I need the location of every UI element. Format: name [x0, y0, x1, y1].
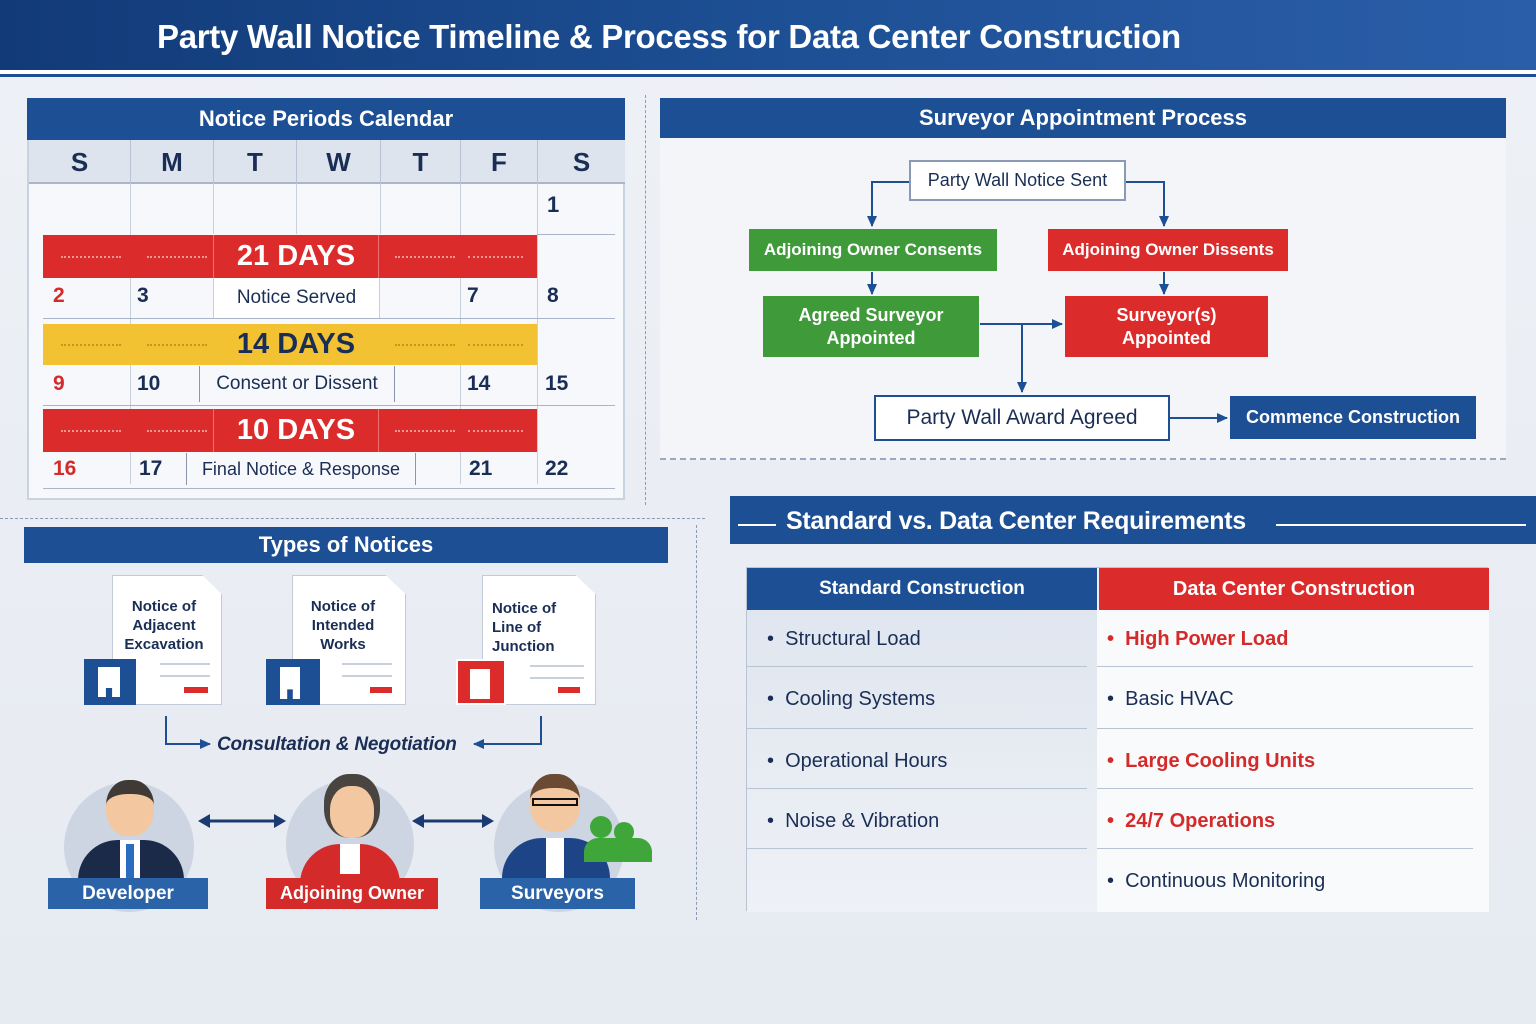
heading: surveyor: Surveyor Appointment Process [919, 105, 1247, 130]
column header: standard [747, 568, 1097, 610]
arrows: consultation [165, 716, 542, 749]
panel: calendar: Notice Served [237, 287, 356, 308]
icon: building [84, 659, 136, 705]
label: surveyors: Surveyors [511, 882, 604, 904]
band: 14 days: 14 DAYS [237, 328, 355, 360]
panel: calendar: 14 [467, 372, 490, 395]
box: dissents [1048, 229, 1288, 271]
column header: data center [1099, 568, 1489, 610]
flowchart arrows [867, 181, 1228, 423]
box: notice sent: Party Wall Notice Sent [928, 170, 1107, 190]
band: 10 days [43, 409, 537, 452]
data center items [1097, 628, 1473, 892]
box: consents: Adjoining Owner Consents [764, 240, 982, 259]
band: 21 days: 21 DAYS [237, 240, 355, 272]
standard items: • Structural Load [767, 628, 921, 650]
panel: calendar: 8 [547, 284, 559, 307]
person: adjoining owner [286, 774, 414, 878]
band: 10 days: 10 DAYS [237, 414, 355, 446]
label: adjoining owner [266, 878, 438, 909]
box: award agreed: Party Wall Award Agreed [906, 406, 1138, 429]
column header: data center: Data Center Construction [1173, 578, 1415, 600]
day headers: M [161, 146, 183, 176]
box: surveyors appointed: Surveyor(s) [1116, 304, 1217, 324]
panel: calendar: 17 [139, 457, 162, 480]
panel: calendar: 22 [545, 457, 568, 480]
label: adjoining owner: Adjoining Owner [280, 883, 424, 903]
panel: calendar: 7 [467, 284, 479, 307]
data center items: • Continuous Monitoring [1107, 870, 1325, 892]
band: 21 days [43, 235, 537, 278]
panel: calendar: Consent or Dissent [216, 373, 378, 394]
notice: line of junction [456, 575, 596, 705]
panel: calendar: 1 [547, 192, 559, 217]
panel: calendar [27, 98, 625, 500]
day headers [29, 140, 625, 184]
box: commence [1230, 396, 1476, 439]
data center items: • 24/7 Operations [1107, 810, 1275, 832]
icon: building [266, 659, 320, 705]
heading: calendar: Notice Periods Calendar [199, 106, 453, 131]
day headers: W [326, 146, 351, 176]
arrow: double 2 [412, 814, 494, 828]
box: agreed surveyor: Appointed [826, 328, 915, 348]
notice: line of junction: Notice of [492, 600, 556, 617]
data center items: • Large Cooling Units [1107, 750, 1315, 772]
person: developer [64, 780, 194, 912]
standard items: • Noise & Vibration [767, 810, 939, 832]
day headers: S [71, 146, 88, 176]
day headers: T [413, 146, 428, 176]
panel: calendar: 21 [469, 457, 492, 480]
box: agreed surveyor [763, 296, 979, 357]
panel: calendar: 3 [137, 284, 149, 307]
box: dissents: Adjoining Owner Dissents [1062, 240, 1274, 259]
box: notice sent [909, 160, 1126, 201]
box: agreed surveyor: Agreed Surveyor [798, 304, 944, 324]
heading: types: Types of Notices [259, 532, 433, 557]
data center items: • High Power Load [1107, 628, 1288, 650]
label: surveyors [480, 878, 635, 909]
box: surveyors appointed: Appointed [1122, 328, 1211, 348]
notice: excavation: Notice of Adjacent Excavation [124, 598, 204, 653]
panel: calendar: 10 [137, 372, 160, 395]
notice: intended works: Notice of Intended Works [311, 598, 375, 653]
heading: surveyor [660, 98, 1506, 138]
label: developer [48, 878, 208, 909]
day headers: F [491, 146, 507, 176]
box: award agreed [874, 395, 1170, 441]
arrow: double 1 [198, 814, 286, 828]
data center items: • Basic HVAC [1107, 688, 1234, 710]
day headers: T [247, 146, 263, 176]
heading: calendar [27, 98, 625, 140]
standard items [747, 628, 1087, 849]
label: developer: Developer [82, 882, 174, 904]
column header: standard: Standard Construction [819, 578, 1025, 599]
band: 14 days [43, 324, 537, 365]
row: final notice: 16 [53, 457, 76, 480]
box: consents [749, 229, 997, 271]
person: surveyor [494, 774, 652, 912]
heading: requirements [730, 496, 1536, 544]
standard items: • Operational Hours [767, 750, 947, 772]
box: commence: Commence Construction [1246, 407, 1460, 427]
day headers: S [573, 146, 590, 176]
panel: types of notices [24, 527, 668, 912]
title bar: Party Wall Notice Timeline & Process for Data Center Construction [157, 18, 1181, 55]
heading: requirements: Standard vs. Data Center Requirements [786, 507, 1246, 535]
standard items: • Cooling Systems [767, 688, 935, 710]
panel: calendar: Final Notice & Response [202, 458, 400, 478]
icon: red door [456, 659, 506, 705]
row: notice served: 2 [53, 284, 65, 307]
heading: types [24, 527, 668, 563]
notice: line of junction: Junction [492, 638, 554, 655]
notice: intended works [266, 575, 406, 705]
notice: line of junction: Line of [492, 619, 541, 636]
text: consultation: Consultation & Negotiation [217, 734, 457, 755]
row: consent or dissent: 9 [53, 372, 65, 395]
box: surveyors appointed [1065, 296, 1268, 357]
panel: surveyor process [660, 98, 1506, 460]
panel: calendar: 15 [545, 372, 568, 395]
table: requirements [746, 567, 1488, 911]
title bar [0, 0, 1536, 74]
notice: excavation [84, 575, 222, 705]
